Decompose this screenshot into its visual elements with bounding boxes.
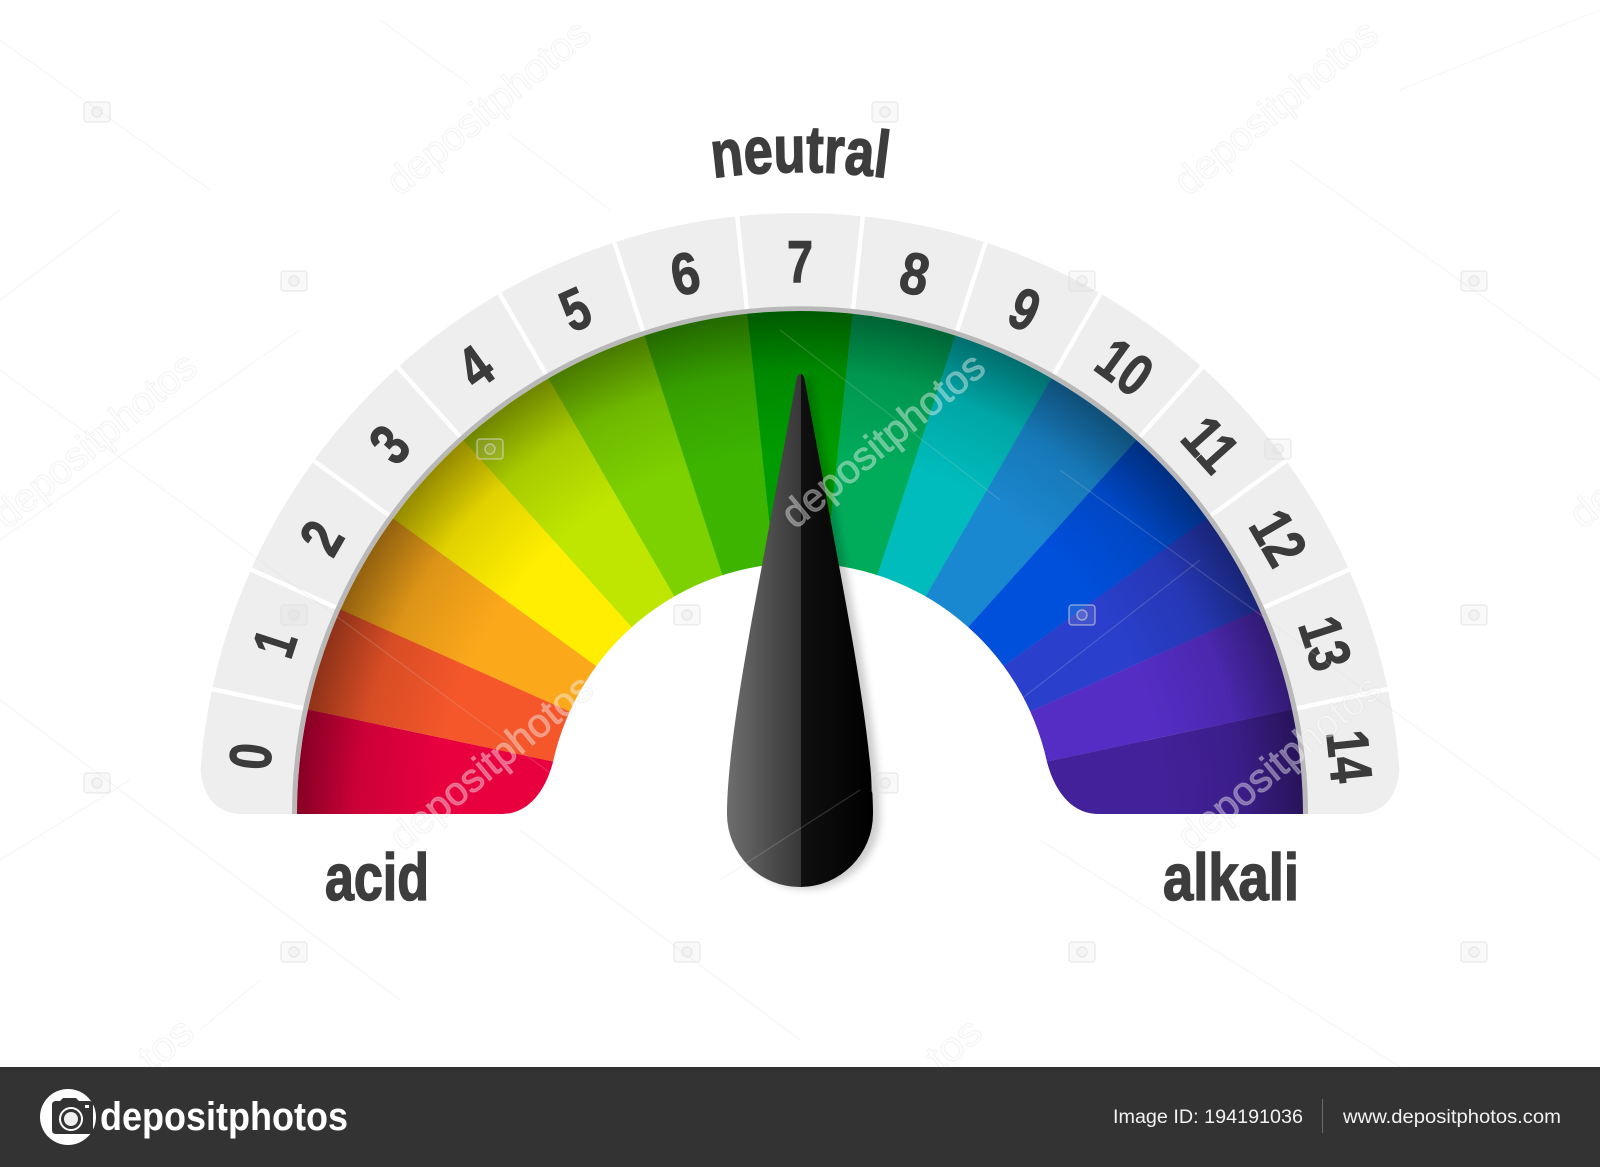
website url: www.depositphotos.com bbox=[1342, 1107, 1561, 1128]
tile 11 bbox=[1134, 367, 1287, 522]
number 13: 13 bbox=[1286, 608, 1364, 678]
wedge 2 bbox=[340, 518, 596, 712]
camera icon bbox=[281, 942, 307, 962]
camera icon bbox=[1265, 439, 1291, 459]
camera icon bbox=[281, 271, 307, 291]
camera icon bbox=[1069, 605, 1095, 625]
watermark fragment bottom centre: tos bbox=[918, 1009, 990, 1080]
watermark text top right: depositphotos bbox=[1166, 11, 1387, 204]
tile 8 bbox=[845, 214, 984, 334]
number 2: 2 bbox=[287, 510, 357, 566]
camera icon bbox=[1069, 942, 1095, 962]
camera icon bbox=[477, 439, 503, 459]
number 1: 1 bbox=[240, 622, 310, 665]
watermark text lower right: depositphotos bbox=[1169, 666, 1390, 859]
logo wordmark: depositphotos bbox=[100, 1095, 348, 1139]
number 11: 11 bbox=[1169, 404, 1251, 485]
tile 1 bbox=[210, 571, 340, 716]
wedge 5 bbox=[548, 336, 722, 596]
wedge 13 bbox=[1030, 610, 1292, 762]
heading: neutral: neutral bbox=[712, 128, 890, 178]
number 14: 14 bbox=[1313, 727, 1385, 786]
number 9: 9 bbox=[999, 274, 1050, 345]
watermark fragment bottom left: tos bbox=[130, 1009, 202, 1080]
label: alkali: alkali bbox=[1163, 840, 1299, 914]
image id: Image ID: 194191036 bbox=[1113, 1107, 1303, 1128]
wedge 3 bbox=[393, 440, 632, 666]
number 6: 6 bbox=[665, 239, 706, 309]
watermark: camera icons bbox=[84, 102, 1487, 962]
wedge 6 bbox=[644, 314, 770, 576]
tile 3 bbox=[313, 367, 466, 522]
tile 2 bbox=[249, 461, 394, 615]
camera icon bbox=[674, 942, 700, 962]
number 8: 8 bbox=[894, 239, 935, 309]
tile 6 bbox=[616, 214, 755, 334]
scale numbers 0 to 14 bbox=[217, 229, 1385, 786]
rim shading on fan bbox=[297, 311, 1303, 814]
wedge 7 bbox=[747, 311, 853, 525]
tile 14 bbox=[1295, 691, 1399, 814]
panel: footer bar bbox=[0, 1067, 1600, 1167]
camera icon bbox=[1461, 605, 1487, 625]
wedge 9 bbox=[878, 336, 1052, 596]
number 12: 12 bbox=[1236, 499, 1320, 577]
wedge 10 bbox=[926, 378, 1137, 628]
camera icon bbox=[1461, 942, 1487, 962]
tile 7 bbox=[739, 213, 861, 311]
camera icon bbox=[872, 773, 898, 793]
camera icon bbox=[872, 102, 898, 122]
grey number scale ring bbox=[201, 213, 1399, 814]
tile 10 bbox=[1047, 292, 1202, 442]
tile 9 bbox=[949, 240, 1100, 379]
tile 4 bbox=[398, 292, 553, 442]
wedge 8 bbox=[830, 314, 956, 576]
tile 12 bbox=[1206, 461, 1351, 615]
wedge 0 bbox=[297, 710, 554, 814]
needle pointer bbox=[727, 374, 880, 889]
wedge 1 bbox=[308, 610, 570, 762]
number 10: 10 bbox=[1084, 325, 1165, 409]
wedge 4 bbox=[463, 378, 674, 628]
number 4: 4 bbox=[445, 333, 506, 402]
tile 0 bbox=[201, 691, 305, 814]
camera icon bbox=[1461, 271, 1487, 291]
camera icon bbox=[84, 102, 110, 122]
camera icon bbox=[674, 605, 700, 625]
number 3: 3 bbox=[357, 413, 423, 476]
wedge 11 bbox=[968, 440, 1207, 666]
number 5: 5 bbox=[550, 274, 601, 345]
number 7: 7 bbox=[787, 229, 813, 295]
watermark text top centre-left: depositphotos bbox=[378, 11, 599, 204]
tile 13 bbox=[1260, 571, 1390, 716]
watermark text lower left: depositphotos bbox=[381, 666, 602, 859]
camera icon bbox=[281, 605, 307, 625]
wedge 14 bbox=[1046, 710, 1303, 814]
wedge 12 bbox=[1004, 518, 1260, 712]
label: acid: acid bbox=[325, 840, 429, 914]
watermark text centre: depositphotos bbox=[773, 344, 994, 537]
tile 5 bbox=[500, 240, 651, 379]
icon: camera logo bbox=[40, 1089, 96, 1145]
camera icon bbox=[1069, 271, 1095, 291]
camera icon bbox=[84, 773, 110, 793]
number 0: 0 bbox=[217, 740, 285, 773]
grey rim band around colour fan bbox=[294, 309, 1306, 814]
colour fan: pH wedges bbox=[297, 311, 1303, 814]
